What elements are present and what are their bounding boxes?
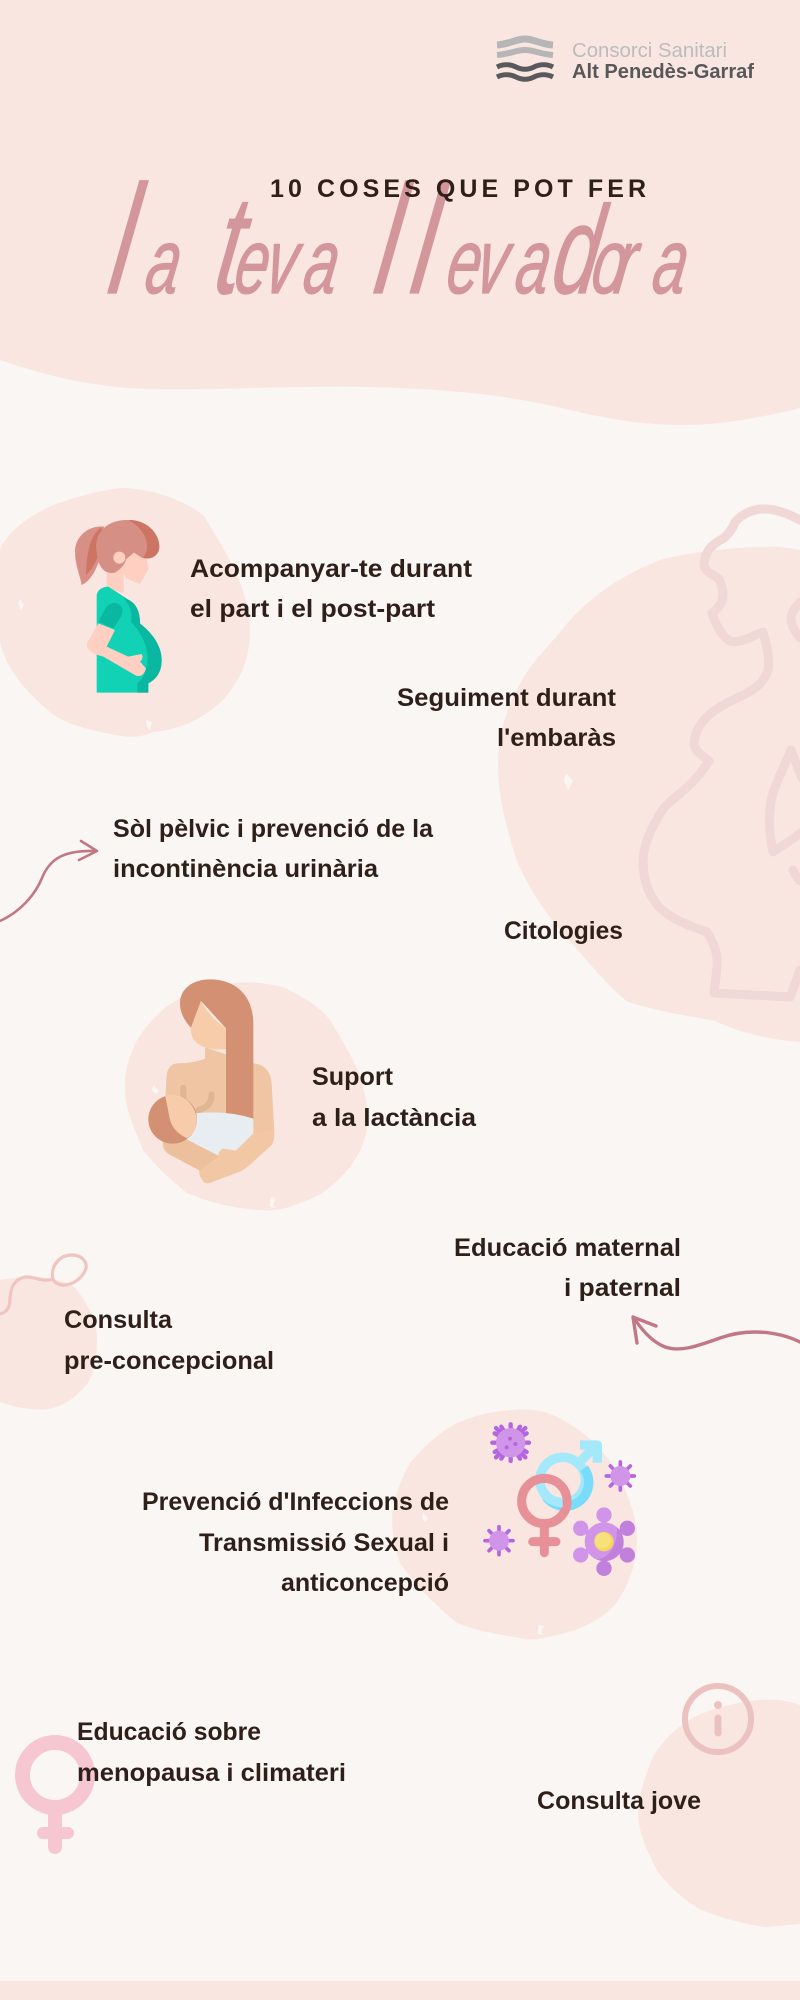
text: educació maternal: i paternal: [564, 1274, 681, 1302]
text: seguiment durant l'embaràs: [397, 684, 617, 752]
text: acompanyar-te: el part i el post-part: [190, 595, 436, 623]
virus large: [492, 1424, 529, 1461]
text: consulta pre-concepcional: [64, 1306, 274, 1375]
text: consulta pre-concepcional: pre-concepcional: [64, 1347, 274, 1375]
footer band: [0, 1981, 800, 2000]
text: menopausa: [77, 1718, 346, 1787]
text: seguiment durant l'embaràs: Seguiment durant: [397, 684, 617, 712]
breast lines: [183, 1088, 212, 1110]
icon: breastfeeding mother: [148, 979, 274, 1183]
icon: squiggle with loop: [0, 1255, 86, 1314]
blob: bottom right: [638, 1700, 800, 1927]
text: prevenció ITS: Transmissió Sexual i: [199, 1529, 449, 1557]
virus small left: [485, 1527, 513, 1555]
arm: [199, 1130, 274, 1183]
text: consulta pre-concepcional: Consulta: [64, 1306, 173, 1334]
logo icon: waves: [497, 39, 553, 79]
icon: info circle: [685, 1686, 751, 1752]
text: citologies: Citologies: [504, 917, 623, 945]
female symbol: [522, 1478, 567, 1553]
hair: [96, 520, 159, 573]
text: menopausa: menopausa i climateri: [77, 1759, 346, 1787]
dress: [97, 587, 162, 693]
text: consulta jove: Consulta jove: [537, 1787, 701, 1815]
logo name line 2: Alt Penedès-Garraf: [572, 61, 754, 83]
blanket: [186, 1112, 253, 1156]
text: suport a la lactància: [312, 1063, 477, 1132]
text: suport a la lactància: Suport: [312, 1063, 394, 1091]
icon: pregnant silhouette outline: [643, 509, 800, 997]
logo name line 1: Consorci Sanitari: [572, 40, 727, 62]
text: menopausa: Educació sobre: [77, 1718, 261, 1746]
virus flower: [573, 1507, 635, 1576]
text: seguiment durant l'embaràs: l'embaràs: [497, 724, 616, 752]
text: prevenció ITS: anticoncepció: [281, 1569, 449, 1597]
icon: gender symbols and viruses: [485, 1424, 635, 1576]
header wave panel: [0, 0, 800, 425]
ponytail: [75, 527, 104, 585]
text: suport a la lactància: a la lactància: [312, 1104, 477, 1132]
text: prevenció ITS: [142, 1488, 449, 1597]
text: sòl pèlvic: [113, 815, 434, 883]
face: [191, 1001, 226, 1049]
male symbol: [540, 1445, 597, 1506]
icon: female symbol pink: [22, 1742, 88, 1847]
blob: behind breastfeeding: [125, 982, 367, 1210]
virus small right: [606, 1462, 634, 1490]
blob: behind pregnant woman: [0, 488, 250, 737]
text: acompanyar-te: Acompanyar-te durant: [190, 555, 473, 583]
hair: [180, 979, 253, 1120]
arm: [87, 623, 146, 676]
arrow: to maternal education: [633, 1317, 800, 1349]
blob: right side large: [498, 547, 800, 1042]
logo: Consorci Sanitari Alt Penedès-Garraf: [497, 39, 754, 83]
arrow: to pelvic floor: [0, 841, 97, 921]
title: 10 coses que pot fer: 10 COSES QUE POT FER: [270, 175, 646, 203]
title script: la teva llevadora: latevallevadora: [101, 153, 705, 326]
male ring front segment: [543, 1492, 563, 1503]
torso: [163, 1047, 274, 1173]
icon: pregnant woman: [75, 520, 162, 693]
neck and face: [107, 567, 124, 593]
blob: behind STI icons: [392, 1409, 637, 1639]
blob: left consulta: [0, 1276, 97, 1410]
baby head: [148, 1095, 197, 1144]
text: prevenció ITS: Prevenció d'Infeccions de: [142, 1488, 449, 1516]
text: educació maternal: [454, 1234, 681, 1302]
text: acompanyar-te: [190, 555, 473, 623]
text: sòl pèlvic: incontinència urinària: [113, 855, 379, 883]
text: sòl pèlvic: Sòl pèlvic i prevenció de la: [113, 815, 434, 843]
text: educació maternal: Educació maternal: [454, 1234, 681, 1262]
